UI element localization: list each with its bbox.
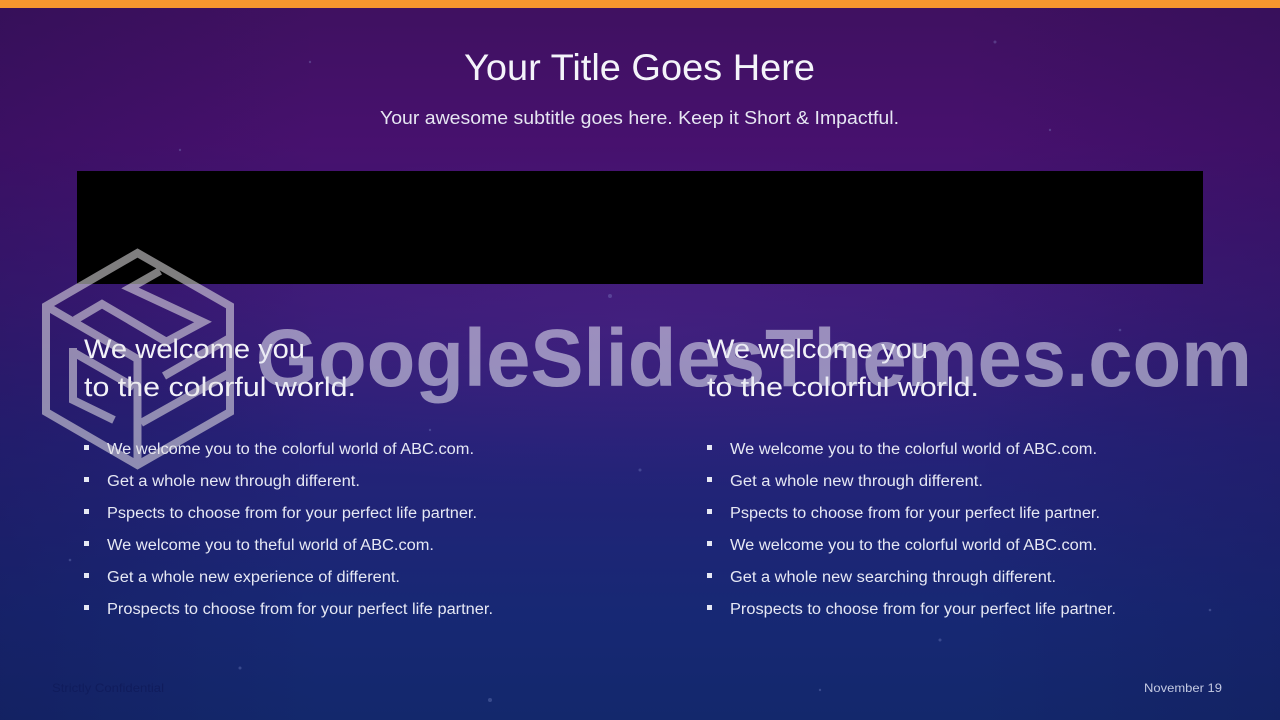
left bullet list: Prospects to choose from for your perfect life partner. [107, 601, 493, 618]
left bullet list: Pspects to choose from for your perfect life partner. [107, 505, 477, 522]
left heading: We welcome you [84, 334, 305, 364]
left heading: to the colorful world. [84, 372, 356, 402]
top accent bar [0, 0, 1280, 8]
right bullet list: Prospects to choose from for your perfect life partner. [730, 601, 1116, 618]
right column [707, 334, 1116, 618]
left bullet list [84, 441, 493, 618]
right heading: to the colorful world. [707, 372, 979, 402]
footer: date: November 19 [1144, 681, 1222, 695]
subtitle: Your awesome subtitle goes here. Keep it Short & Impactful. [380, 107, 899, 128]
left bullet list: We welcome you to theful world of ABC.com. [107, 537, 434, 554]
right bullet list: Get a whole new through different. [730, 473, 983, 490]
right bullet list: Get a whole new searching through different. [730, 569, 1056, 586]
watermark text: GoogleSlidesThemes.com [256, 313, 1252, 404]
right bullet list: We welcome you to the colorful world of ABC.com. [730, 441, 1097, 458]
left bullet list: Get a whole new experience of different. [107, 569, 400, 586]
title: Your Title Goes Here [464, 47, 815, 88]
left column [84, 334, 493, 618]
left bullet list: Get a whole new through different. [107, 473, 360, 490]
footer: confidentiality note: Strictly Confidential [52, 681, 164, 695]
right bullet list: We welcome you to the colorful world of ABC.com. [730, 537, 1097, 554]
left bullet list: We welcome you to the colorful world of ABC.com. [107, 441, 474, 458]
right heading [707, 334, 979, 402]
watermark logo: cube [46, 253, 230, 465]
right heading: We welcome you [707, 334, 928, 364]
right bullet list [707, 441, 1116, 618]
black banner [77, 171, 1203, 284]
left heading [84, 334, 356, 402]
right bullet list: Pspects to choose from for your perfect life partner. [730, 505, 1100, 522]
